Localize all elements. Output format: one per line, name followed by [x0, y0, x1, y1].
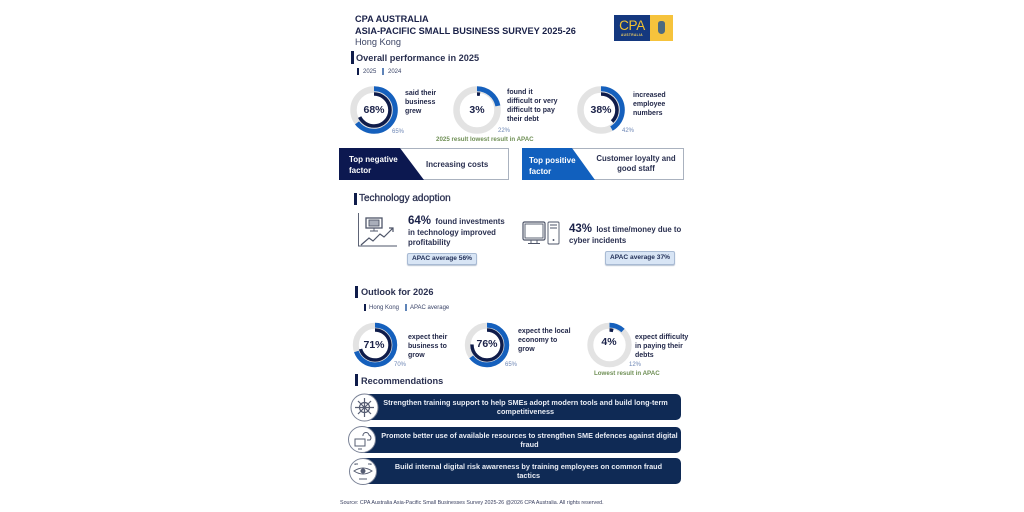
title: CPA AUSTRALIA — [355, 14, 429, 24]
donut: 76% expect economy growth — [467, 325, 507, 365]
donut: 38% increased employees — [580, 89, 622, 131]
stat: 64% technology profitability: profitability — [408, 238, 450, 247]
text: said their business grew — [405, 90, 436, 114]
text: said their business grew: said their — [405, 90, 436, 96]
callout: APAC average 56%: APAC average 56% — [412, 255, 472, 262]
source footnote: Source: CPA Australia Asia-Pacific Small Businesses Survey 2025-26 @2026 CPA Australia. All rights reserved. — [340, 500, 604, 506]
text: expect the local economy to grow — [518, 328, 571, 352]
text: expect their business to grow — [408, 334, 448, 358]
text: found it difficult: found it — [507, 88, 533, 96]
legend: Hong Kong vs APAC: Hong Kong — [369, 305, 399, 311]
text: expect difficulty paying debts: debts — [635, 352, 654, 358]
value: 68%: 68% — [363, 104, 384, 116]
text: expect difficulty paying debts — [635, 334, 688, 358]
value: 76%: 76% — [476, 338, 498, 350]
text: said their business grew: business — [405, 98, 435, 106]
text: expect difficulty paying debts: in paying their — [635, 342, 683, 350]
recommendation 2 — [348, 426, 681, 453]
text: found it difficult — [507, 88, 558, 122]
recommendation 1: competitiveness — [497, 407, 554, 416]
text: found it difficult: difficult or very — [507, 98, 558, 104]
donut: 3% difficult to pay debt — [456, 89, 498, 131]
comparison: 65%: 65% — [392, 129, 404, 135]
legend: 2025 vs 2024 — [357, 68, 402, 75]
panel: top positive factor: factor — [529, 167, 551, 176]
callout: APAC average 56% — [407, 253, 477, 265]
value: 38%: 38% — [590, 104, 612, 116]
comparison: 42%: 42% — [622, 128, 634, 134]
stat: 43% cyber incidents: cyber incidents — [569, 236, 626, 245]
legend: Hong Kong vs APAC: APAC average — [410, 305, 449, 311]
recommendation 1: Strengthen training support to help SMEs adopt modern tools and build long-term — [383, 398, 668, 406]
legend: 2025 vs 2024: 2024 — [388, 69, 401, 75]
comparison: 12%: 12% — [629, 362, 641, 368]
stat: 43% cyber incidents: 43% lost time/money due to — [569, 223, 681, 235]
logo: CPA Australia — [614, 15, 673, 41]
recommendation 3: tactics — [517, 471, 540, 480]
stat: 64% technology profitability: 64% found investments — [408, 215, 505, 227]
text: increased employee numbers: increased — [633, 92, 666, 99]
value: 3%: 3% — [469, 104, 485, 116]
recommendation 3 — [349, 458, 681, 485]
icon: investment growth chart — [358, 213, 397, 246]
heading: overall performance: Overall performance in 2025 — [356, 53, 479, 63]
recommendation 2: fraud — [520, 440, 539, 449]
stat: 43% cyber incidents — [569, 223, 681, 245]
panel: top negative factor — [339, 148, 509, 180]
panel: top positive factor — [522, 148, 684, 180]
icon: cloud and monitor — [348, 426, 376, 453]
icon: desktop computer — [522, 221, 560, 244]
donut: 71% expect business growth — [355, 325, 395, 365]
donut: 68% said business grew — [353, 89, 395, 131]
text: increased employee numbers: employee — [633, 101, 665, 108]
stat: 64% technology profitability: in technology improved — [408, 228, 496, 236]
value: 71%: 71% — [363, 339, 384, 351]
panel: top positive factor: Customer loyalty and good staff — [596, 154, 676, 173]
stat: 64% technology profitability — [408, 215, 505, 247]
logo: CPA Australia: AUSTRALIA — [621, 33, 643, 37]
value: 4%: 4% — [601, 336, 617, 348]
comparison: 70%: 70% — [394, 362, 406, 368]
text: expect their business to grow: business to — [408, 342, 447, 350]
panel: top negative factor: Increasing costs — [426, 160, 488, 169]
donut: 4% expect debt difficulty — [590, 325, 629, 365]
text: expect the local economy to grow: economy to — [518, 336, 557, 344]
text: increased employee numbers: numbers — [633, 110, 663, 117]
text: expect the local economy to grow: expect the local — [518, 328, 571, 334]
title — [355, 14, 576, 47]
text: expect difficulty paying debts: expect difficulty — [635, 334, 688, 340]
icon: eye scan — [349, 458, 377, 485]
text: expect the local economy to grow: grow — [518, 346, 535, 352]
recommendation 3: Build internal digital risk awareness by training employees on common fraud — [395, 462, 662, 470]
legend: Hong Kong vs APAC — [364, 304, 449, 311]
title: Hong Kong — [355, 37, 401, 47]
panel: top positive factor: Top positive — [529, 156, 576, 165]
logo: CPA Australia: CPA — [619, 18, 645, 33]
recommendation 2: Promote better use of available resources to strengthen SME defences against digital — [381, 430, 678, 440]
text: expect their business to grow: grow — [408, 352, 425, 358]
legend: 2025 vs 2024: 2025 — [363, 69, 376, 75]
recommendation 1 — [350, 394, 681, 422]
text: found it difficult: their debt — [507, 116, 539, 122]
comparison: 65%: 65% — [505, 362, 517, 368]
note: lowest result in APAC: Lowest result in APAC — [594, 370, 660, 377]
callout: APAC average 37% — [605, 251, 675, 265]
text: increased employee numbers — [633, 92, 666, 117]
title: ASIA-PACIFIC SMALL BUSINESS SURVEY 2025-26 — [355, 26, 576, 36]
panel: top negative factor: factor — [349, 166, 371, 175]
text: expect their business to grow: expect their — [408, 334, 447, 340]
icon: network wheel — [350, 394, 378, 422]
panel: top negative factor: Top negative — [349, 155, 398, 164]
note: lowest result: 2025 result lowest result in APAC — [436, 136, 534, 143]
text: said their business grew: grew — [405, 108, 421, 114]
heading: outlook: Outlook for 2026 — [361, 287, 434, 297]
heading: recommendations: Recommendations — [361, 376, 443, 386]
comparison: 22%: 22% — [498, 128, 510, 134]
heading: technology adoption: Technology adoption — [359, 193, 451, 204]
text: found it difficult: difficult to pay — [507, 106, 555, 114]
callout: APAC average 37%: APAC average 37% — [610, 254, 670, 261]
